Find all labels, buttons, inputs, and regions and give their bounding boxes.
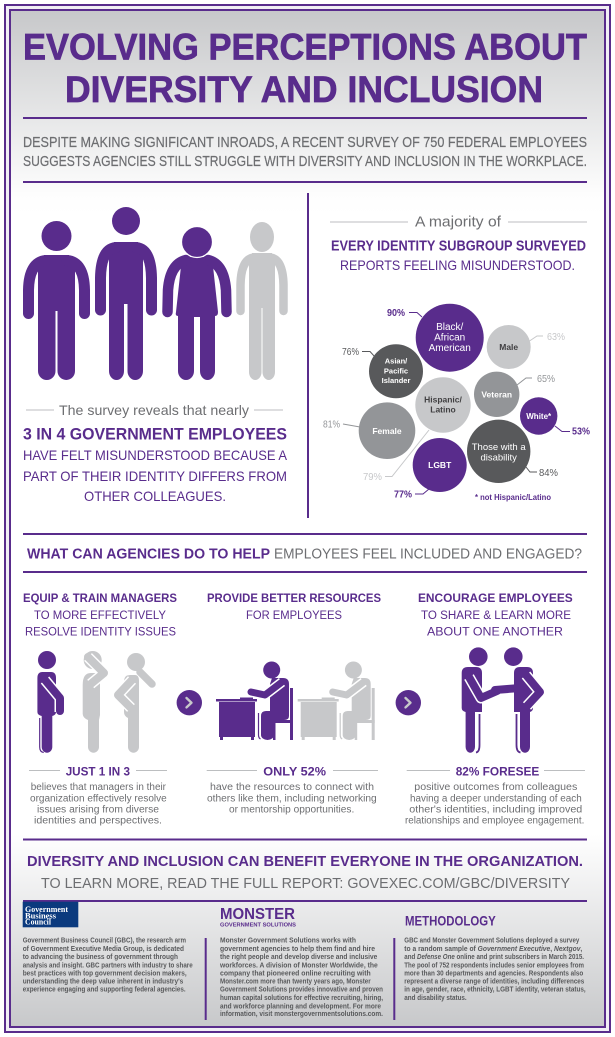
bubble: Asian/Pacific Islander 76%: Asian/	[385, 356, 408, 366]
text: Monster description: government agencies to help them find and hire	[220, 946, 375, 953]
bubble: Female 81%: 81%	[323, 418, 340, 430]
title: DIVERSITY AND INCLUSION	[65, 68, 543, 110]
bubble: Male 63%	[487, 325, 565, 369]
text: GBC description: to advancing the business of government through	[23, 954, 178, 961]
arrow: first chevron circle	[177, 690, 202, 715]
icon: three standing figures	[37, 651, 152, 753]
heading: provide better resources	[207, 593, 381, 622]
panel: equip and train managers	[23, 593, 177, 826]
text: Monster description: Monster.com more than twenty years ago, Monster	[220, 979, 371, 986]
text: GBC description: of Government Executive Media Group, is dedicated	[23, 946, 184, 953]
text: Monster description: company that pioneered online recruiting with	[220, 971, 371, 978]
text: 82% foresee: relationships and employee engagement.	[405, 815, 584, 826]
icon: grey figure at desk	[298, 662, 375, 740]
text: methodology description: to a random sample of Government Executive, Nextgov,	[404, 946, 582, 953]
text: just 1 in 3: identities and perspectives.	[34, 815, 162, 826]
bubble: Asian/Pacific Islander 76%: Islander	[382, 376, 410, 385]
text: methodology description: The pool of 752 respondents includes senior employees from	[404, 962, 584, 969]
text: Monster description: Monster Government Solutions works with	[220, 938, 356, 945]
text: survey reveals: The survey reveals that nearly	[59, 402, 249, 418]
bubble: Hispanic/Latino 79%: Latino	[430, 405, 456, 415]
footer: Government Business Council	[23, 902, 193, 994]
text: methodology description	[404, 938, 586, 1002]
text: just 1 in 3: organization effectively resolve	[30, 793, 167, 804]
text: majority heading: EVERY IDENTITY SUBGROUP SURVEYED	[331, 238, 586, 254]
bubble: Asian/Pacific Islander 76%	[342, 344, 423, 398]
call to action	[27, 854, 583, 892]
icon: person 2	[100, 207, 152, 380]
heading: provide better resources: FOR EMPLOYEES	[246, 610, 342, 622]
bubble: White 53%	[520, 397, 591, 438]
text: methodology description: and Defense One online and print subscribers in March 2015.	[404, 954, 584, 961]
text: majority heading	[330, 214, 587, 273]
text: 82% foresee: other's identities, including improved	[409, 805, 582, 816]
text: 3 in 4 government employees: 3 IN 4 GOVERNMENT EMPLOYEES	[23, 424, 287, 444]
bubble: Female 81%: Female	[372, 426, 402, 436]
logo: GBC: Business	[25, 911, 56, 920]
heading: equip and train: EQUIP & TRAIN MANAGERS	[23, 593, 177, 605]
text: 82% foresee: 82% FORESEE	[456, 765, 539, 779]
text: 3 in 4 government employees: HAVE FELT MISUNDERSTOOD BECAUSE A	[23, 447, 288, 463]
text: just 1 in 3: issues arising from diverse	[37, 805, 159, 816]
bubble: Hispanic/Latino 79%: 79%	[363, 471, 382, 483]
bubble: Those with a disability 84%: disability	[480, 453, 517, 464]
icon: grey figure arm akimbo	[118, 653, 152, 753]
text: 3 in 4 government employees: OTHER COLLEAGUES.	[84, 488, 226, 504]
text: 3 in 4 government employees	[23, 424, 288, 504]
text: 82% foresee: having a deeper understanding of each	[410, 793, 582, 804]
panel: identity subgroups	[323, 214, 591, 502]
footer: Methodology	[404, 914, 586, 1002]
text: methodology description: represent a diverse range of identities, including differences	[404, 979, 584, 986]
bubble: Female 81%	[323, 402, 415, 459]
bubble: Black/African American 90%	[387, 304, 484, 372]
bubble: White 53%: 53%	[572, 426, 591, 438]
bubble: LGBT 77%	[394, 438, 467, 500]
text: GBC description: best practices with top government decision makers,	[23, 971, 187, 978]
text: Monster description: and workforce planning and development. For more	[220, 1003, 381, 1010]
heading: encourage employees: TO SHARE & LEARN MORE	[421, 610, 571, 622]
panel: survey people	[23, 207, 288, 504]
text: methodology description: more than 30 departments and agencies. Respondents also	[404, 971, 583, 978]
heading: encourage employees: ENCOURAGE EMPLOYEES	[418, 593, 573, 605]
text: Monster description: workforces. A division of Monster Worldwide, the	[219, 962, 378, 969]
bubble: Hispanic/Latino 79%: Hispanic/	[424, 395, 463, 405]
panel: encourage employees	[405, 593, 585, 826]
text: GBC description	[23, 938, 193, 994]
bubble chart	[323, 304, 591, 502]
footnote: not Hispanic/Latino: * not Hispanic/Latino	[475, 493, 551, 502]
text: only 52%: ONLY 52%	[263, 765, 326, 779]
panel: provide better resources	[207, 593, 381, 816]
text: GBC description: understanding the deep value inherent in industry's	[23, 979, 183, 986]
bubble: Veteran 65%	[474, 372, 555, 417]
icon: purple figure at desk	[216, 662, 293, 740]
heading: provide better resources: PROVIDE BETTER RESOURCES	[207, 593, 381, 605]
bubble: Those with a disability 84%: Those with a	[472, 442, 526, 453]
text: only 52%	[207, 765, 378, 816]
logo: GBC	[23, 902, 78, 927]
bubble: Black/African American 90%: Black/	[436, 322, 464, 333]
icon: person 1	[28, 221, 84, 380]
text: majority heading: A majority of	[415, 214, 502, 230]
text: GBC description: analysis and insight. GBC partners with industry to share	[23, 962, 193, 969]
bubble: Black/African American 90%: 90%	[387, 307, 406, 319]
text: just 1 in 3: JUST 1 IN 3	[66, 765, 130, 779]
text: GBC description: experience engaging and supporting federal agencies.	[23, 987, 186, 994]
bubble: Black/African American 90%: American	[429, 343, 471, 354]
title	[23, 26, 587, 110]
text: Monster description	[219, 938, 383, 1018]
call to action: DIVERSITY AND INCLUSION CAN BENEFIT EVERYONE IN THE ORGANIZATION.	[27, 854, 583, 870]
text: Monster description: the right people and develop diverse and inclusive	[220, 954, 377, 961]
bubble: Asian/Pacific Islander 76%: Pacific	[384, 366, 408, 376]
logo: Monster: MONSTER	[220, 906, 295, 923]
bubble: Those with a disability 84%: 84%	[539, 467, 558, 479]
bubble: LGBT 77%: LGBT	[428, 460, 452, 470]
bubble: Asian/Pacific Islander 76%: 76%	[342, 346, 359, 358]
text: only 52%: others like them, including networking	[207, 793, 377, 804]
heading: encourage employees	[418, 593, 573, 638]
bubble: Black/African American 90%: African	[434, 332, 465, 344]
text: 82% foresee: positive outcomes from colleagues	[414, 782, 577, 793]
text: 82% foresee	[405, 765, 585, 826]
icon: person 4 grey	[240, 222, 284, 380]
icon: person 3	[168, 226, 226, 380]
text: only 52%: have the resources to connect with	[210, 782, 374, 793]
text: Monster description: Government Solutions provides innovative and proven	[220, 987, 383, 994]
bubble: Male 63%: 63%	[547, 331, 565, 343]
text: just 1 in 3: believes that managers in their	[31, 782, 167, 793]
text: GBC description: Government Business Council (GBC), the research arm	[23, 938, 186, 945]
text: just 1 in 3	[29, 765, 167, 826]
intro text	[23, 134, 587, 170]
bubble: Hispanic/Latino 79%	[363, 377, 471, 483]
heading: equip and train: TO MORE EFFECTIVELY	[34, 610, 166, 622]
bubble: Veteran 65%: 65%	[537, 373, 555, 385]
logo: GBC: Government	[25, 905, 68, 914]
icon: group of four people	[28, 207, 284, 380]
text: majority heading: REPORTS FEELING MISUNDERSTOOD.	[340, 257, 575, 273]
text: Monster description: human capital solutions for effective recruiting, hiring,	[220, 995, 383, 1002]
call to action: TO LEARN MORE, READ THE FULL REPORT: GOVEXEC.COM/GBC/DIVERSITY	[41, 875, 570, 892]
logo: Monster: GOVERNMENT SOLUTIONS	[220, 923, 296, 929]
heading: equip and train: RESOLVE IDENTITY ISSUES	[25, 626, 176, 638]
arrow: second chevron circle	[396, 690, 421, 715]
text: only 52%: or mentorship opportunities.	[229, 805, 354, 816]
bubble: White 53%: White*	[526, 412, 552, 421]
text: 3 in 4 government employees: PART OF THEIR IDENTITY DIFFERS FROM	[23, 468, 287, 484]
bubble: LGBT 77%: 77%	[394, 488, 413, 500]
heading: what can agencies do: WHAT CAN AGENCIES DO TO HELP	[27, 546, 270, 562]
icon: grey figure hand on head	[83, 651, 104, 753]
logo: GBC: Council	[25, 918, 52, 926]
footer: Monster Government Solutions	[219, 906, 383, 1018]
heading: equip and train	[23, 593, 177, 638]
text: Monster description: information, visit monstergovernmentsolutions.com.	[220, 1011, 383, 1018]
bubble: Veteran 65%: Veteran	[481, 390, 512, 400]
heading: what can agencies do	[27, 546, 582, 562]
heading: encourage employees: ABOUT ONE ANOTHER	[427, 626, 563, 638]
bubble: Male 63%: Male	[499, 342, 518, 352]
heading: methodology: METHODOLOGY	[405, 914, 496, 929]
icon: purple figure	[37, 651, 60, 753]
text: methodology description: and disability status.	[404, 995, 467, 1002]
heading: what can agencies do: EMPLOYEES FEEL INCLUDED AND ENGAGED?	[274, 546, 582, 562]
bubble: Those with a disability 84%	[467, 420, 558, 483]
text: methodology description: in age, gender, race, ethnicity, LGBT identity, veteran status,	[404, 987, 586, 994]
icon: two figures shaking hands	[462, 647, 540, 753]
text: methodology description: GBC and Monster Government Solutions deployed a survey	[404, 938, 579, 945]
